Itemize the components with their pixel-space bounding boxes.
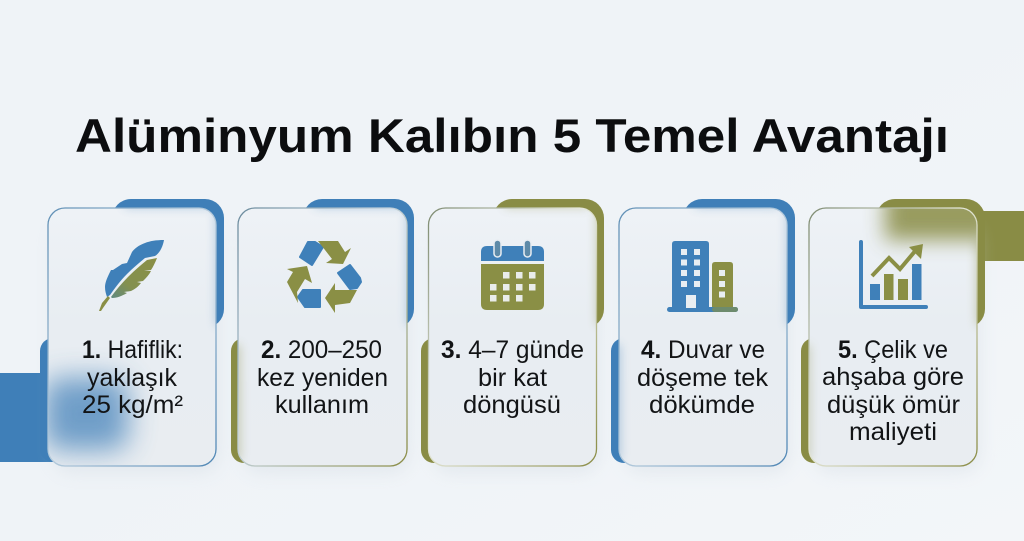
left accent bar xyxy=(0,373,60,462)
text: card 2: 2. 200–250 xyxy=(261,336,382,364)
panel: card 4 buildings: döşeme tek xyxy=(637,364,768,392)
infographic canvas xyxy=(0,118,1024,473)
panel: card 4 buildings: dökümde xyxy=(649,391,755,419)
panel: card 3 calendar: bir kat xyxy=(478,364,547,392)
panel: card 1 lightness: yaklaşık xyxy=(87,364,177,392)
panel: card 2 recycling xyxy=(231,194,415,474)
panel: card 2 recycling: kullanım xyxy=(275,391,369,419)
icon: calendar xyxy=(481,240,544,310)
panel: card 2 recycling: kez yeniden xyxy=(257,364,388,392)
title: Alüminyum Kalıbın 5 Temel Avantajı xyxy=(75,109,949,162)
panel: card 3 calendar xyxy=(421,194,605,474)
icon: growth chart xyxy=(861,242,926,307)
panel: card 5 growth chart xyxy=(801,190,995,474)
panel: card 5 growth chart: düşük ömür xyxy=(827,391,960,419)
panel: card 5 growth chart: ahşaba göre xyxy=(822,363,964,391)
text: card 1: 1. Hafiflik: xyxy=(82,336,183,364)
panel: card 3 calendar: döngüsü xyxy=(463,391,561,419)
text: card 5: 5. Çelik ve xyxy=(838,336,948,364)
icon: feather xyxy=(99,240,164,311)
right accent bar xyxy=(970,211,1024,261)
panel: card 5 growth chart: maliyeti xyxy=(849,418,937,446)
text: card 4: 4. Duvar ve xyxy=(641,336,765,364)
text: card 3: 3. 4–7 günde xyxy=(441,336,584,364)
panel: card 1 lightness: 25 kg/m² xyxy=(82,391,183,419)
icon: buildings xyxy=(667,241,738,312)
icon: recycling xyxy=(287,241,361,313)
panel: card 1 lightness xyxy=(40,194,224,474)
panel: card 4 buildings xyxy=(611,194,795,474)
